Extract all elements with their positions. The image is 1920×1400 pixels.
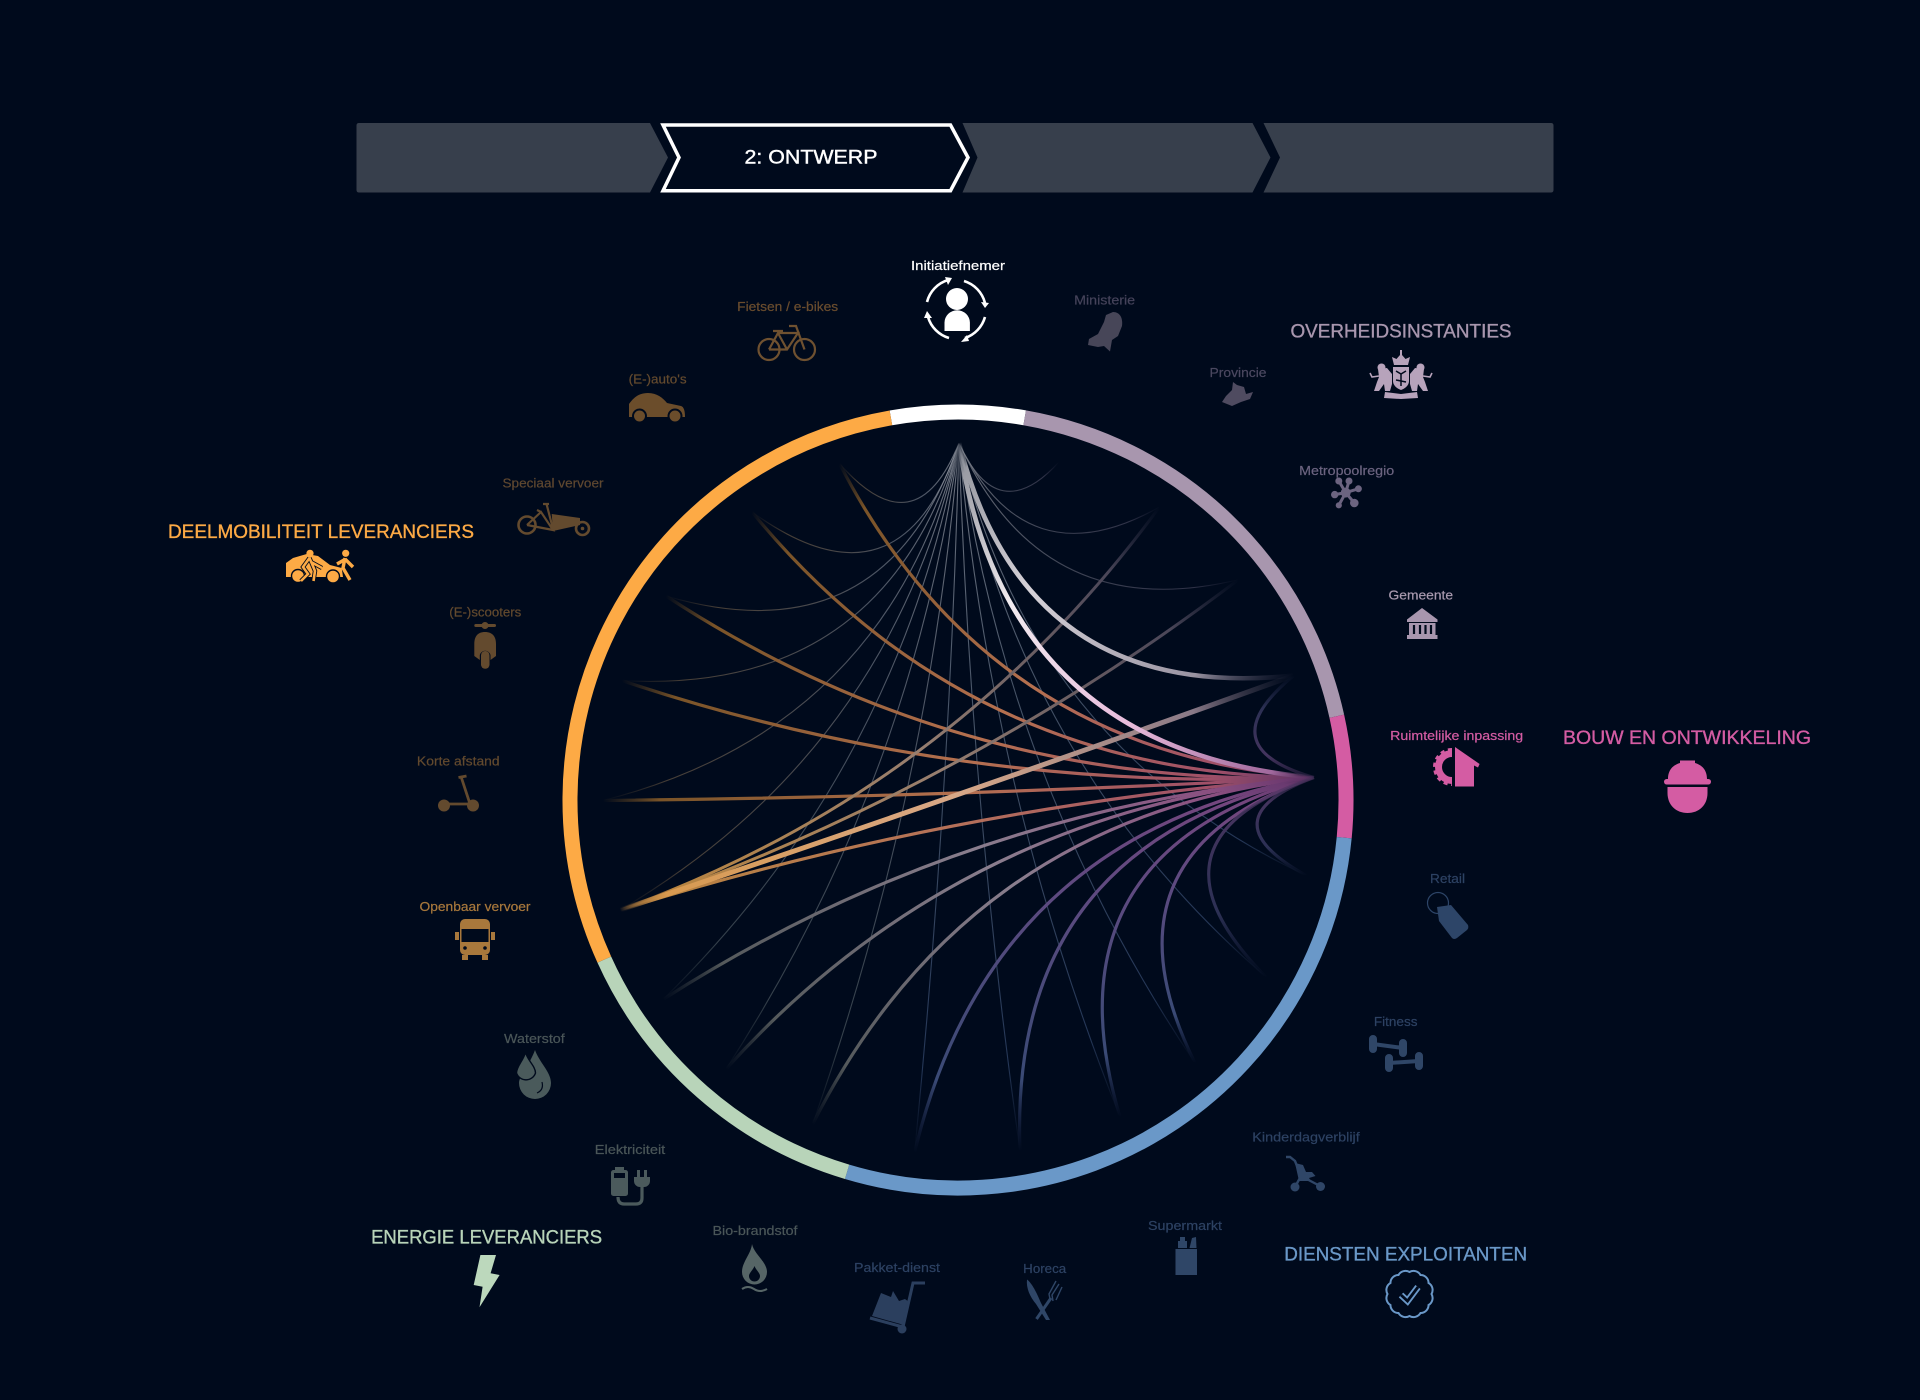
label: (E-)auto's <box>629 372 687 386</box>
heading group: Overheidsinstanties <box>1290 322 1512 399</box>
label: (E-)scooters <box>449 604 522 619</box>
label: Retail <box>1430 871 1465 886</box>
icon: car and pedestrians <box>286 550 353 583</box>
heading group: Diensten exploitanten <box>1284 1244 1527 1317</box>
icon: lightning bolt <box>474 1255 500 1307</box>
thick chords initiatiefnemer to gemeente and ruimtelijke inpassing <box>959 443 1314 778</box>
icon: bicycle <box>758 326 815 360</box>
thin chords from initiatiefnemer <box>603 443 1306 1152</box>
title: OVERHEIDSINSTANTIES <box>1290 322 1512 342</box>
icon: map of the Netherlands <box>1088 312 1122 352</box>
ring segments <box>570 412 1346 1188</box>
icon: town hall <box>1407 608 1438 639</box>
icon: person with cycle arrows <box>924 277 989 342</box>
label: Metropoolregio <box>1299 463 1394 478</box>
chord diagram <box>570 412 1346 1188</box>
title: DEELMOBILITEIT LEVERANCIERS <box>168 522 474 543</box>
icon: knife and fork <box>1027 1280 1062 1320</box>
node: Provincie <box>1210 365 1266 406</box>
node: Pakket-dienst <box>854 1260 940 1334</box>
node: Initiatiefnemer <box>911 258 1006 342</box>
label: Ruimtelijke inpassing <box>1390 728 1523 743</box>
icon: gear with check <box>1386 1271 1433 1317</box>
icon: kick scooter <box>438 776 479 812</box>
icon: network nodes <box>1332 478 1361 508</box>
label: Kinderdagverblijf <box>1252 1130 1360 1144</box>
node: Supermarkt <box>1148 1218 1222 1275</box>
label: Fitness <box>1374 1014 1418 1029</box>
heading group: Bouw en ontwikkeling <box>1563 728 1811 813</box>
label: Supermarkt <box>1148 1218 1222 1233</box>
icon: bus <box>455 919 495 960</box>
label: Provincie <box>1210 365 1266 380</box>
node: Horeca <box>1023 1261 1067 1320</box>
label: Gemeente <box>1389 588 1453 603</box>
node: Bio-brandstof <box>712 1223 798 1291</box>
icon: water drops <box>516 1050 551 1099</box>
label: Elektriciteit <box>595 1142 666 1157</box>
icon: gear and house <box>1435 747 1480 786</box>
label: Initiatiefnemer <box>911 258 1006 273</box>
step 2 active chevron: 2: ONTWERP <box>744 146 878 168</box>
process steps bar <box>356 123 1554 192</box>
icon: province shape <box>1222 382 1253 406</box>
node: Openbaar vervoer <box>420 899 531 960</box>
icon: parcel trolley <box>870 1283 925 1334</box>
label: Fietsen / e-bikes <box>737 299 839 314</box>
title: BOUW EN ONTWIKKELING <box>1563 728 1811 749</box>
icon: coat of arms <box>1370 350 1432 399</box>
icon: car <box>629 393 685 422</box>
node: Ministerie <box>1074 292 1135 352</box>
chords from openbaar vervoer <box>620 507 1294 910</box>
node: Fitness <box>1373 1014 1419 1068</box>
node: Elektriciteit <box>595 1142 666 1204</box>
node: Korte afstand <box>417 754 500 812</box>
icon: price tag <box>1428 892 1468 939</box>
node: Fietsen / e-bikes <box>737 299 839 360</box>
node: Ruimtelijke inpassing <box>1390 728 1523 786</box>
node: (E-)scooters <box>449 604 522 669</box>
title: DIENSTEN EXPLOITANTEN <box>1284 1244 1527 1266</box>
node: Retail <box>1428 871 1468 939</box>
icon: moped <box>474 622 496 669</box>
step 2 active chevron <box>663 125 968 191</box>
heading group: Energie leveranciers <box>371 1228 602 1307</box>
label: Korte afstand <box>417 754 500 768</box>
label: Openbaar vervoer <box>420 899 531 914</box>
step 1 chevron <box>356 123 668 192</box>
node: Speciaal vervoer <box>502 476 604 535</box>
step 4 chevron <box>1264 123 1554 192</box>
icon: grocery bag <box>1176 1237 1197 1275</box>
icon: battery and plug <box>611 1167 650 1204</box>
label: Horeca <box>1023 1261 1067 1276</box>
node: Waterstof <box>504 1031 565 1099</box>
label: Ministerie <box>1074 292 1135 308</box>
chords from ruimtelijke inpassing <box>603 464 1314 1152</box>
icon: stroller <box>1286 1157 1325 1192</box>
icon: flame <box>742 1244 767 1291</box>
node: Kinderdagverblijf <box>1252 1130 1360 1192</box>
node: Gemeente <box>1389 588 1453 639</box>
node: (E-)auto's <box>629 372 687 422</box>
icon: cargo bike <box>518 504 589 535</box>
heading group: Deelmobiliteit leveranciers <box>168 522 474 583</box>
label: Waterstof <box>504 1031 565 1046</box>
label: Pakket-dienst <box>854 1260 940 1275</box>
icon: construction helmet <box>1664 760 1711 813</box>
title: ENERGIE LEVERANCIERS <box>371 1228 602 1248</box>
node: Metropoolregio <box>1299 463 1394 508</box>
icon: dumbbells <box>1373 1039 1419 1068</box>
label: Speciaal vervoer <box>502 476 604 490</box>
step 3 chevron <box>962 123 1270 192</box>
label: Bio-brandstof <box>712 1223 798 1238</box>
